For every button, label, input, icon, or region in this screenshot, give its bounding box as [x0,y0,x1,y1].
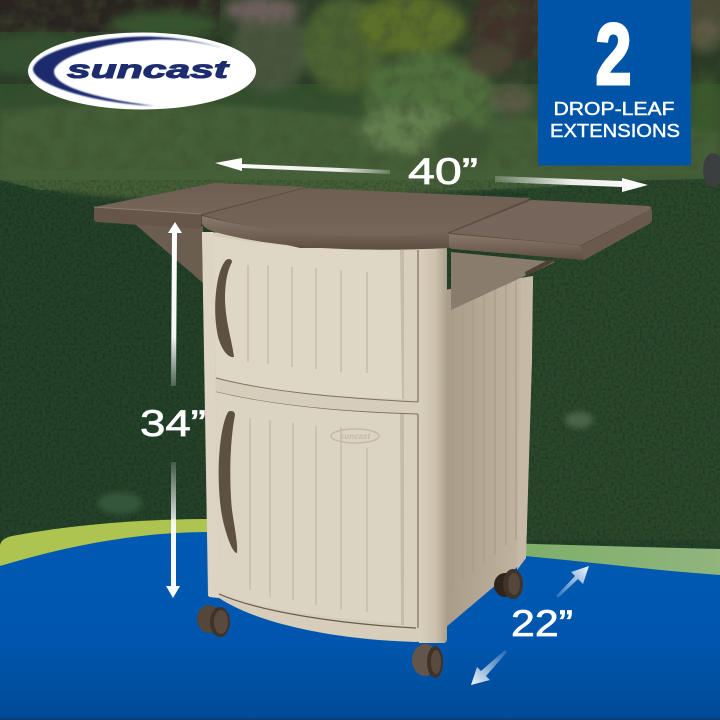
tabletop underlay [94,183,650,255]
numeral 2: 2 [596,7,632,103]
center top [202,188,531,250]
label: 40 in: 40” [408,151,478,192]
arrow: down left [471,650,507,685]
lower handle [219,411,237,553]
embossed door logo [331,429,379,443]
right drop leaf [449,200,652,260]
lower door [216,392,404,625]
arrow: up right [556,566,589,598]
dimension: depth 22 in [471,566,589,685]
dimension: width 40 in [215,151,648,192]
side panel [444,276,533,628]
badge caption: EXTENSIONS [550,120,680,141]
corner caster [412,644,443,678]
left drop leaf [94,183,306,229]
cabinet front base [202,232,447,642]
front caster [197,605,230,637]
upper handle [215,259,234,357]
upper door [213,236,404,399]
grass texture [0,180,720,555]
arrow: right [495,176,648,192]
label: 22 in: 22” [511,603,573,644]
floor: green band and blue ground [0,519,720,720]
wordmark: suncast [67,56,231,84]
right bracket [451,252,555,310]
embossed door logo: suncast [340,432,370,441]
badge: 2 drop-leaf extensions [538,0,691,166]
foliage texture [0,0,720,170]
rear caster [494,569,523,599]
dimension: height 34 in [140,222,206,598]
foliage [0,0,720,167]
logo: suncast [28,32,256,110]
badge caption: DROP-LEAF [554,98,674,119]
arrow: up [168,222,182,386]
arrow: down [166,462,180,598]
label: 34 in: 34” [140,403,206,444]
dark rock [703,153,720,187]
corner post [419,245,447,643]
divider lines [216,378,418,402]
left bracket [135,224,203,283]
product: patio cabinet [94,183,652,678]
arrow: left [215,158,390,174]
badge caption [550,98,680,141]
